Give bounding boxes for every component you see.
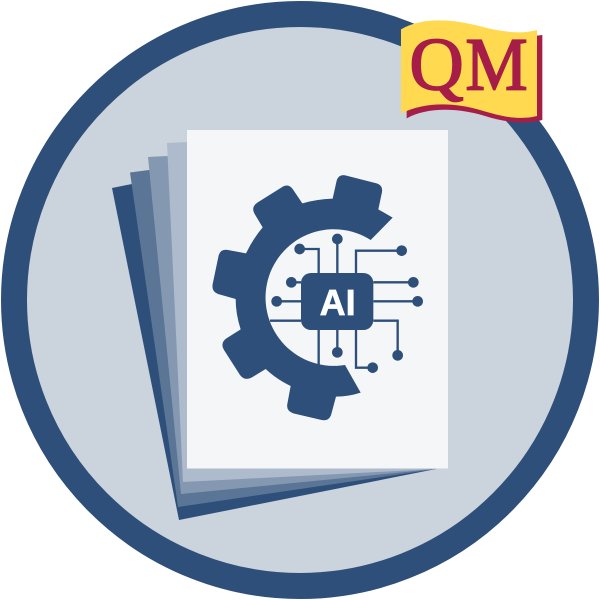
flag shadow <box>407 35 542 122</box>
chip <box>301 273 373 330</box>
icon: AI gear <box>212 175 423 420</box>
QM logo flag <box>401 20 542 122</box>
circuit traces <box>270 239 418 368</box>
flag body <box>401 20 537 118</box>
logo letter M: M <box>465 22 528 106</box>
page layer: dark <box>130 170 436 507</box>
logo letter Q: Q <box>409 23 464 106</box>
page layer: darkest <box>112 184 436 520</box>
stack of document pages <box>112 130 448 520</box>
page layer: light <box>167 142 436 482</box>
circuit nodes <box>271 234 423 373</box>
front page <box>187 130 448 468</box>
page layer: medium <box>148 156 436 494</box>
gear outline <box>212 175 393 420</box>
chip label: AI <box>320 282 356 323</box>
